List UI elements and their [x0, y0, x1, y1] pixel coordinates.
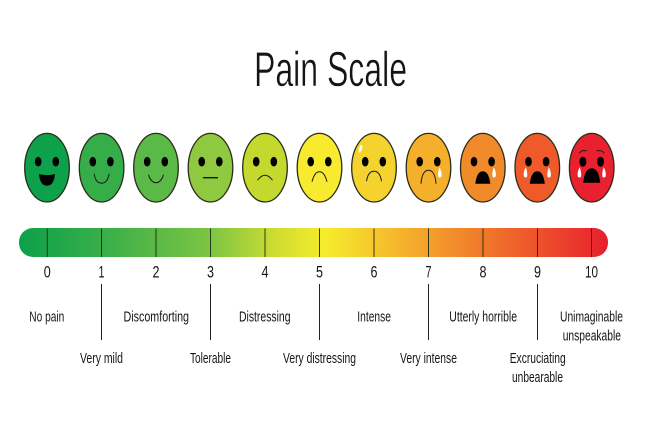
pain labels: Excruciating: [510, 350, 566, 367]
pain labels: Very mild: [80, 350, 123, 367]
pain labels: Very intense: [400, 350, 457, 367]
pain labels: Tolerable: [190, 350, 231, 367]
faces row: [25, 133, 614, 202]
pain labels: No pain: [29, 308, 64, 326]
pain labels: unbearable: [512, 369, 563, 386]
scale numbers: 6: [370, 262, 378, 282]
scale numbers: 10: [585, 262, 598, 282]
pain labels: Unimaginable: [560, 308, 623, 326]
pain labels: unspeakable: [563, 328, 621, 344]
pain labels: Discomforting: [124, 308, 189, 326]
scale numbers: 1: [98, 262, 104, 282]
icon: face 4 slight frown: [243, 133, 287, 202]
leader lines: [102, 284, 538, 340]
gradient scale bar: [19, 228, 608, 257]
scale numbers: 0: [44, 262, 51, 282]
icon: face 1 smile: [79, 133, 124, 202]
scale numbers: 5: [316, 262, 323, 282]
pain labels: Utterly horrible: [449, 308, 517, 326]
scale numbers: 4: [262, 262, 268, 282]
icon: face 10 crying with brows: [569, 133, 614, 202]
scale numbers: 2: [152, 262, 160, 282]
scale numbers: 9: [534, 262, 541, 282]
pain labels: Intense: [357, 308, 391, 326]
icon: face 5 frown: [297, 133, 342, 202]
scale numbers: [44, 262, 598, 282]
icon: face 2 slight smile: [134, 133, 178, 202]
pain labels: Very distressing: [283, 350, 356, 367]
pain labels: [29, 308, 623, 386]
scale numbers: 3: [207, 262, 214, 282]
icon: face 3 neutral: [188, 133, 233, 202]
scale numbers: 7: [426, 262, 432, 282]
title: Pain Scale: [254, 43, 407, 97]
icon: face 7 frown with tear: [406, 133, 451, 202]
icon: face 8 open mouth with tear: [460, 133, 505, 202]
icon: face 0 big smile: [25, 133, 69, 202]
pain labels: Distressing: [239, 308, 290, 326]
icon: face 6 frown: [352, 133, 396, 202]
scale numbers: 8: [480, 262, 486, 282]
icon: face 9 open mouth with two tears: [515, 133, 560, 202]
